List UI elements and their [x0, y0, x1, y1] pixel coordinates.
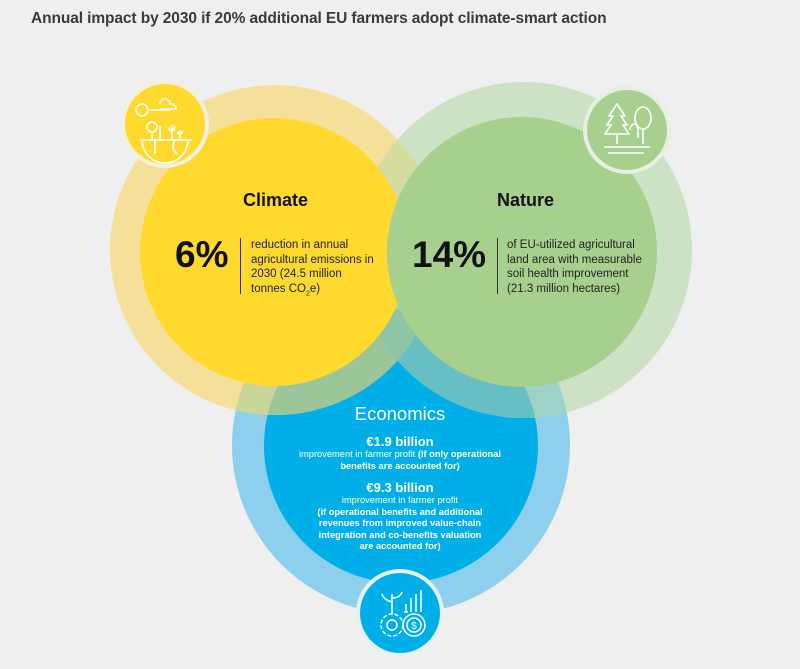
economics text: integration and co-benefits valuation — [319, 530, 481, 540]
venn diagram — [110, 80, 692, 653]
inner circle: economics — [264, 309, 538, 583]
title: Annual impact by 2030 if 20% additional EU farmers adopt climate-smart action — [31, 10, 606, 27]
nature stat — [412, 234, 642, 294]
nature stat: 14% — [412, 234, 486, 275]
outer ring: nature — [378, 82, 692, 418]
economics text: Economics — [355, 403, 445, 424]
inner circle: nature — [387, 117, 657, 387]
outer ring: climate — [110, 85, 398, 415]
climate heading: Climate — [243, 190, 308, 210]
economics text: €9.3 billion — [366, 480, 434, 495]
icon: climate — [121, 80, 209, 168]
nature heading: Nature — [497, 190, 554, 210]
inner circle: climate — [140, 118, 408, 386]
outer ring: economics — [232, 276, 570, 614]
economics text: revenues from improved value-chain — [319, 518, 481, 528]
icon: nature — [583, 86, 671, 174]
economics text: benefits are accounted for) — [340, 460, 460, 470]
nature stat: of EU-utilized agricultural land area with measurable soil health improvement (21.3 million hectares) — [507, 239, 642, 294]
icon: economics — [356, 569, 444, 657]
icon: economics: $ — [411, 621, 417, 632]
economics text: (if operational benefits and additional — [317, 506, 483, 516]
climate stat — [175, 234, 374, 297]
climate stat: reduction in annual agricultural emissions in 2030 (24.5 million tonnes CO2e) — [251, 239, 374, 297]
economics text: are accounted for) — [359, 541, 441, 551]
climate stat: 6% — [175, 234, 228, 275]
economics text — [299, 403, 501, 551]
economics text: improvement in farmer profit (if only operational — [299, 449, 501, 459]
economics text: €1.9 billion — [366, 434, 434, 449]
economics text: improvement in farmer profit — [342, 495, 458, 505]
